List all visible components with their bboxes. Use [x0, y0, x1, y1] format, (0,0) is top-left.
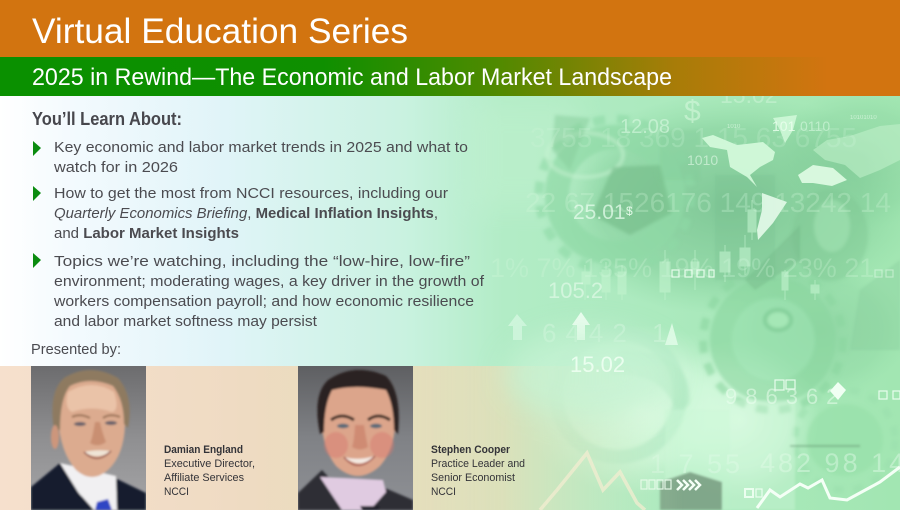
learning panel — [31, 109, 485, 358]
background figures: 10101010 — [850, 115, 877, 121]
background figures: 22 67 1526176 149 13242 14 — [525, 187, 891, 218]
presenter: Damian England: Affiliate Services — [164, 472, 244, 484]
south america — [757, 193, 787, 240]
presenter: Damian England: Damian England — [164, 444, 243, 456]
presenter: Stephen Cooper: Practice Leader and — [431, 458, 525, 470]
background figures: 101 — [772, 118, 796, 134]
bullet text — [54, 185, 448, 242]
background figures: 6442 1 — [542, 318, 676, 348]
arrows and chevrons — [508, 312, 846, 490]
presenter: Stephen Cooper: NCCI — [431, 486, 456, 498]
background figures: 3755 18 369 1 15 63 6755 — [530, 122, 857, 153]
icon: green arrow — [33, 253, 41, 268]
background figures: 1 7 55 — [650, 449, 743, 479]
figure 15.02: 15.02 — [570, 352, 625, 377]
presented by label: Presented by: — [31, 341, 121, 358]
background figures — [490, 82, 900, 479]
bullet text: Topics we’re watching, including the “low-hire, low-fire” — [54, 253, 470, 270]
icon: green arrow — [33, 186, 41, 201]
portrait: Stephen Cooper — [298, 366, 413, 510]
bullet text: Key economic and labor market trends in 2025 and what to — [54, 139, 468, 156]
bullet text: environment; moderating wages, a key driver in the growth of — [54, 273, 485, 290]
title bar — [0, 0, 900, 57]
presenter: Damian England: Executive Director, — [164, 458, 255, 470]
bullet text: and Labor Market Insights — [54, 225, 239, 242]
bullet text: watch for in 2026 — [53, 159, 178, 176]
portrait: Damian England — [31, 366, 146, 510]
presenters band — [0, 366, 720, 510]
tone patches — [530, 109, 900, 483]
bullet text — [53, 139, 468, 176]
background figures: $ — [626, 204, 633, 218]
icon: green arrow — [33, 141, 41, 156]
soft band fade — [505, 330, 675, 420]
world map — [702, 115, 900, 240]
subtitle: 2025 in Rewind—The Economic and Labor Market Landscape — [32, 64, 672, 91]
bullet text: and labor market softness may persist — [54, 313, 318, 330]
north america — [702, 135, 775, 187]
bullet text: workers compensation payroll; and how economic resilience — [53, 293, 474, 310]
africa — [798, 165, 847, 186]
presenter: Damian England — [164, 444, 255, 498]
background figures: 1010 — [687, 152, 718, 168]
bullet 3 — [33, 253, 485, 330]
bullet text: How to get the most from NCCI resources, including our — [54, 185, 448, 202]
presenter: Stephen Cooper: Stephen Cooper — [431, 444, 511, 456]
background figures: 0110 — [800, 118, 830, 134]
small square glyphs — [641, 270, 900, 497]
background figures: 986362 — [725, 384, 846, 409]
background figures: 25.01 — [573, 201, 626, 224]
bullet 2 — [33, 185, 448, 242]
eurasia — [813, 124, 900, 178]
title: Virtual Education Series — [32, 12, 408, 51]
financial collage — [470, 82, 900, 510]
background figures: $ — [684, 95, 701, 128]
pale line chart — [540, 453, 645, 510]
white line chart — [757, 467, 900, 508]
presenter: Damian England: NCCI — [164, 486, 189, 498]
background figures: 1010 — [727, 124, 741, 130]
background figures: 15.02 — [720, 82, 778, 108]
heading: You’ll Learn About: — [32, 109, 182, 129]
greenland — [773, 115, 797, 143]
gears — [539, 115, 895, 490]
bullet text — [53, 253, 485, 330]
subtitle bar — [0, 57, 900, 96]
background figures: 1% 7% 135% 19% 19% 23% 21 — [490, 253, 874, 283]
background figures: 105.2 — [548, 278, 603, 303]
bullet text: Quarterly Economics Briefing, Medical Inflation Insights, — [54, 205, 438, 222]
background figures: 12.08 — [620, 116, 670, 138]
angular panels — [658, 228, 899, 510]
presenter: Stephen Cooper — [431, 444, 525, 498]
bullet 1 — [33, 139, 468, 176]
candlesticks — [582, 200, 819, 300]
presenter: Stephen Cooper: Senior Economist — [431, 472, 515, 484]
